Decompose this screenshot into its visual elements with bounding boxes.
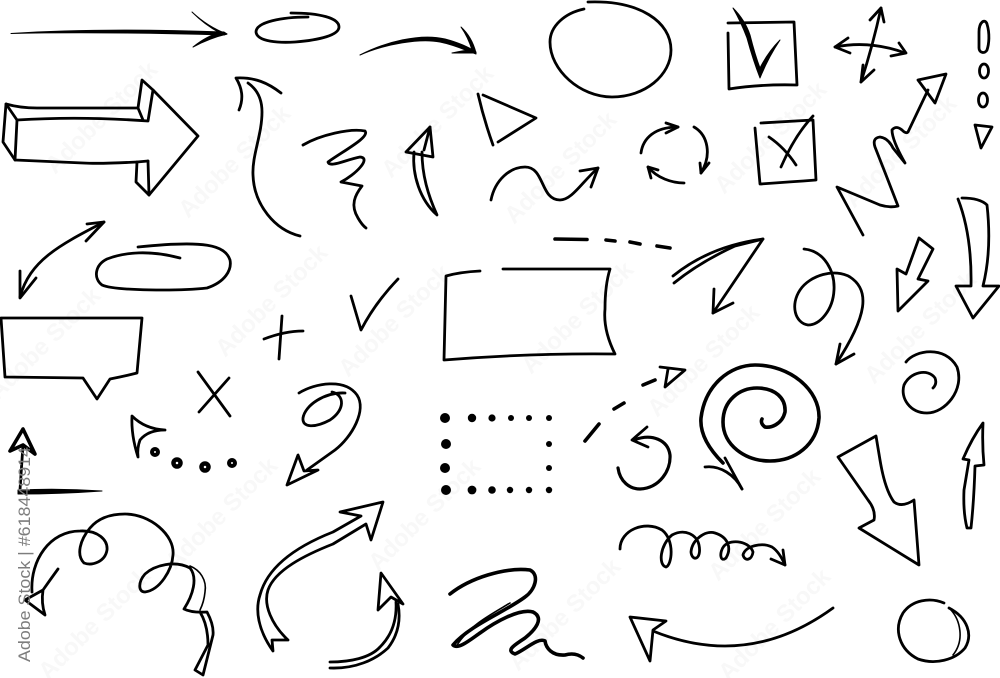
tick mark bbox=[351, 279, 398, 330]
dotted arc arrow bbox=[132, 416, 235, 470]
faint stock watermarks: Adobe Stock bbox=[376, 60, 500, 183]
bottom-right double circle bbox=[898, 600, 969, 662]
faint stock watermarks: Adobe Stock bbox=[499, 106, 623, 229]
open rectangle frame bbox=[444, 269, 615, 360]
faint stock watermarks: Adobe Stock bbox=[333, 259, 457, 382]
vertical stock credit text: Adobe Stock | #618448914 bbox=[15, 447, 34, 662]
squiggle brush stroke bbox=[450, 570, 583, 658]
long hollow down arrow bbox=[956, 198, 999, 318]
double-headed curved arrow bbox=[20, 222, 104, 298]
dashed line bbox=[555, 239, 670, 248]
faint stock watermarks: Adobe Stock bbox=[642, 299, 766, 422]
speech bubble bbox=[1, 318, 142, 399]
faint stock watermarks: Adobe Stock bbox=[40, 56, 164, 179]
small circular arrow bbox=[618, 427, 670, 489]
checkbox with cross bbox=[755, 116, 816, 184]
faint stock watermarks: Adobe Stock bbox=[173, 100, 297, 223]
curl arrow bbox=[287, 384, 360, 485]
elongated oval bbox=[96, 244, 230, 290]
big lightning-shaped down arrow bbox=[838, 436, 919, 565]
faint stock watermarks: Adobe Stock bbox=[363, 453, 487, 576]
upward arrow with hollow stem bbox=[406, 127, 437, 215]
curved arrow bottom centre bbox=[330, 573, 403, 668]
faint stock watermarks: Adobe Stock bbox=[839, 90, 963, 213]
small up arrow right bbox=[963, 423, 984, 528]
multi-loop ribbon arrow bbox=[25, 514, 213, 675]
dashed arrow with triangle head bbox=[585, 367, 685, 441]
up arrow with angled line bbox=[10, 429, 102, 494]
four-way cross arrow bbox=[835, 8, 906, 82]
plus sign bbox=[264, 316, 303, 359]
exclamation column: triangle bbox=[975, 125, 992, 148]
exclamation column: bar bbox=[979, 21, 989, 52]
dotted rectangle bbox=[440, 413, 552, 495]
open triangle bbox=[478, 94, 536, 145]
sharp bent arrow bbox=[673, 239, 763, 313]
wavy arrow bbox=[491, 167, 598, 200]
circular arrows cycle bbox=[641, 123, 709, 183]
small ellipse bbox=[256, 13, 339, 42]
small block arrow bbox=[897, 238, 933, 311]
exclamation column: ring one bbox=[980, 64, 988, 78]
faint stock watermarks: Adobe Stock bbox=[709, 76, 833, 199]
faint stock watermarks: Adobe Stock bbox=[703, 463, 827, 586]
large hand-drawn circle bbox=[550, 2, 671, 97]
zigzag arrow pointing up-right bbox=[837, 74, 946, 235]
big double-line sweeping arrow bbox=[258, 502, 383, 651]
checkbox with tick bbox=[728, 8, 797, 89]
scribble bbox=[303, 130, 366, 228]
swoosh arrow pointing up bbox=[236, 78, 300, 236]
long curved arrow bottom bbox=[630, 608, 833, 661]
faint stock watermarks: Adobe Stock bbox=[503, 553, 627, 676]
faint stock watermarks: Adobe Stock bbox=[516, 256, 640, 379]
small spiral bbox=[903, 352, 959, 413]
loop arrow bbox=[795, 249, 863, 364]
cross sign bbox=[198, 372, 230, 416]
long straight arrow bbox=[11, 12, 227, 47]
faint stock watermarks: Adobe Stock bbox=[859, 266, 983, 389]
coil arrow bbox=[620, 526, 785, 567]
large spiral arrow bbox=[701, 365, 819, 489]
curved arrow top centre bbox=[360, 27, 476, 55]
large 3D block arrow bbox=[3, 80, 198, 195]
faint stock watermarks: Adobe Stock bbox=[160, 452, 284, 575]
exclamation column: ring two bbox=[978, 93, 988, 107]
faint stock watermarks: Adobe Stock bbox=[210, 239, 334, 362]
